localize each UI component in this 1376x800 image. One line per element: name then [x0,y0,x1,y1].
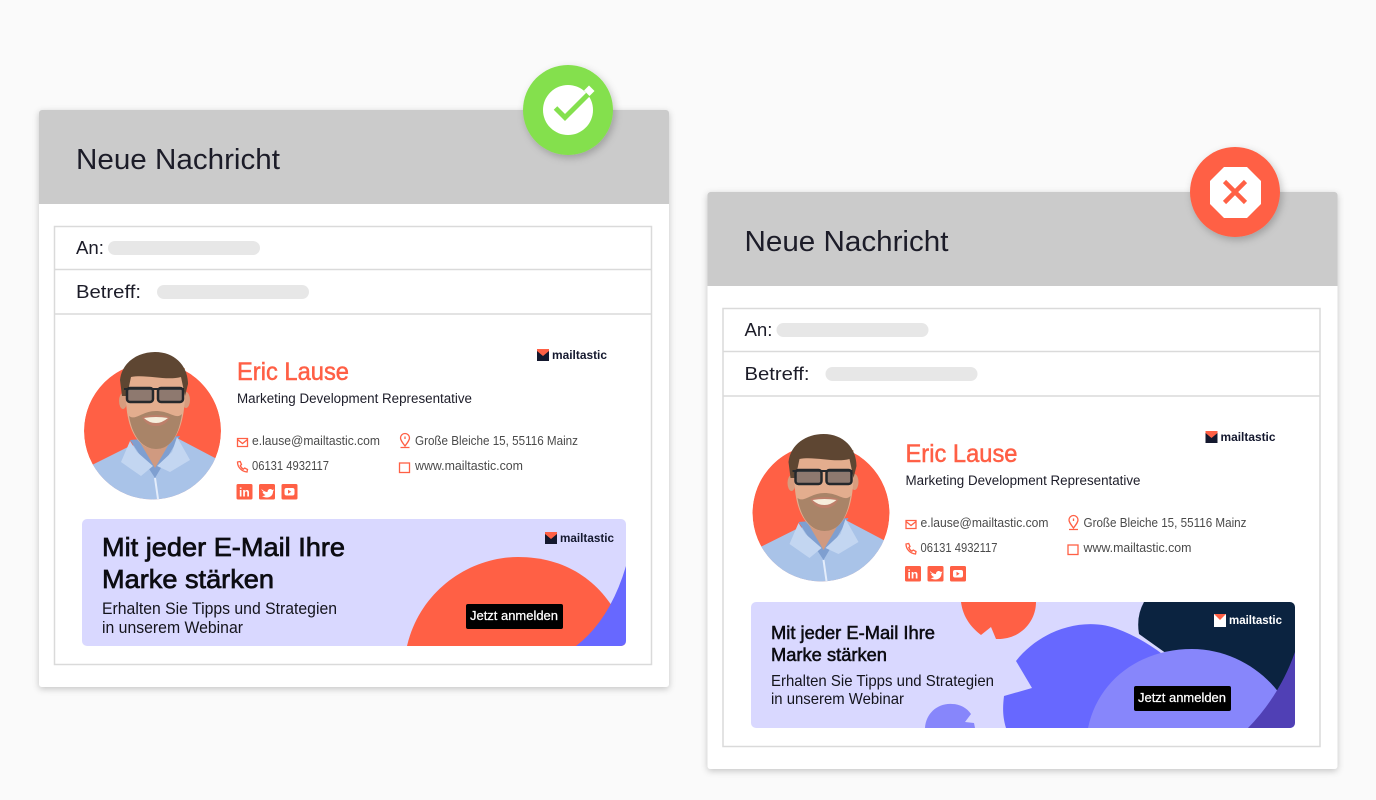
icon: linkedin [236,484,252,500]
banner artwork [751,602,1295,728]
name: Eric Lause [237,358,349,386]
banner artwork [82,519,626,646]
icon: twitter [928,566,944,582]
banner subline [102,600,337,637]
address: Große Bleiche 15, 55116 Mainz [1084,516,1246,530]
panel: good example email window [39,110,669,687]
icon: twitter [259,484,275,500]
banner: webinar, orange variant [82,519,626,646]
label: An: An: [76,238,104,258]
job title: Marketing Development Representative [906,473,1140,488]
website: www.mailtastic.com [1083,541,1192,555]
label: An: An: [744,320,772,340]
logo: mailtastic: mailtastic [1220,430,1276,444]
card background [39,110,669,687]
icon: website [400,463,410,472]
banner headline: Marke stärken [771,644,887,665]
banner headline: Marke stärken [102,564,274,594]
form frame [54,226,652,664]
icon: phone [238,462,248,472]
panel: bad example email window [708,192,1338,769]
label: Betreff: Betreff: [76,282,141,302]
name: Eric Lause [906,440,1018,468]
icon: phone [906,544,916,554]
banner headline [771,622,935,665]
banner subline: Erhalten Sie Tipps und Strategien [771,673,994,690]
portrait photo [752,434,890,582]
email signature [748,430,1276,592]
banner headline: Mit jeder E-Mail Ihre [771,622,935,643]
banner headline: Mit jeder E-Mail Ihre [102,532,345,562]
job title: Marketing Development Representative [237,391,472,406]
icon: location pin [1069,516,1078,530]
banner subline [771,673,994,708]
phone number: 06131 4932117 [920,541,998,555]
icon: website [1068,545,1078,554]
email signature [80,348,607,510]
email address: e.lause@mailtastic.com [252,434,380,448]
banner logo: mailtastic [560,531,614,545]
website: www.mailtastic.com [414,459,523,473]
phone number: 06131 4932117 [252,459,329,473]
subject placeholder [826,367,978,381]
recipient placeholder [776,323,928,337]
icon: red stop badge [1190,147,1280,237]
banner: webinar, busy variant [751,602,1295,728]
banner subline: Erhalten Sie Tipps und Strategien [102,600,337,618]
banner headline [102,532,345,594]
icon: linkedin: in [908,568,918,582]
banner subline: in unserem Webinar [771,691,905,708]
card shell and signature [708,192,1338,769]
logo: mailtastic: mailtastic [552,348,607,362]
subject placeholder [157,285,309,299]
form frame [723,308,1320,746]
icon: linkedin: in [239,486,250,500]
portrait photo [84,352,221,500]
icon: youtube [950,566,966,582]
icon: youtube [282,484,298,500]
label: Betreff: Betreff: [744,364,810,384]
button: Jetzt anmelden [466,604,563,629]
email address: e.lause@mailtastic.com [920,516,1048,530]
address: Große Bleiche 15, 55116 Mainz [415,434,578,448]
button: Jetzt anmelden: Jetzt anmelden [1138,690,1226,705]
heading: Neue Nachricht: Neue Nachricht [744,226,948,258]
card header bar [39,110,669,204]
icon: linkedin [905,566,921,582]
card background [708,192,1338,769]
banner subline: in unserem Webinar [102,619,243,637]
banner logo: mailtastic [1229,613,1282,627]
icon: email [238,438,248,446]
icon: email [906,520,916,528]
icon: location pin [400,434,410,448]
button: Jetzt anmelden [1134,686,1231,711]
recipient placeholder [108,241,260,255]
card header bar [708,192,1338,286]
heading: Neue Nachricht: Neue Nachricht [76,144,280,176]
icon: green check badge [523,65,613,155]
button: Jetzt anmelden: Jetzt anmelden [470,608,558,623]
